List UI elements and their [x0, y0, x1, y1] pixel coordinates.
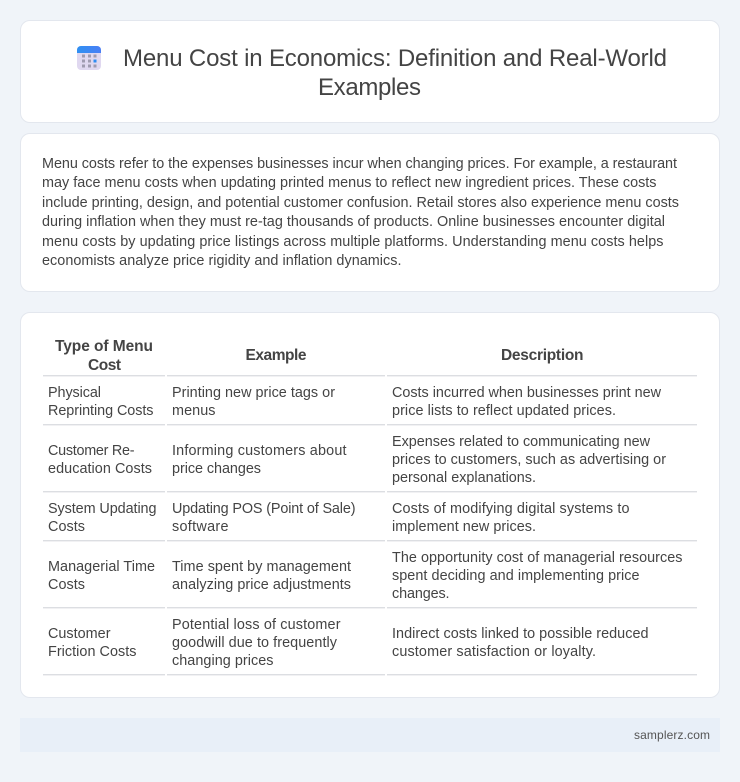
row: customer re-education: price changes [172, 461, 261, 477]
row: system updating: implement new prices. [392, 519, 536, 535]
icon: calendar [77, 46, 101, 70]
row: system updating: Costs of modifying digital systems to [392, 501, 630, 517]
row: system updating: Updating POS (Point of Sale) [172, 501, 356, 517]
title [123, 45, 667, 101]
row: managerial time [48, 550, 682, 602]
table header: Type of Menu [55, 338, 153, 355]
row: customer friction: changing prices [172, 653, 274, 669]
row: physical reprinting: Reprinting Costs [48, 403, 154, 419]
title: Examples [318, 74, 421, 101]
table header [55, 338, 584, 374]
panel: table card [20, 312, 720, 698]
row: system updating: Costs [48, 519, 85, 535]
row: system updating: software [172, 519, 228, 535]
row: customer re-education: prices to customers, such as advertising or [392, 452, 666, 468]
row: physical reprinting: menus [172, 403, 216, 419]
row: physical reprinting: Costs incurred when businesses print new [392, 385, 662, 401]
text block: intro: during inflation when they must re-tag thousands of products. Online businesses encounter digital [42, 214, 665, 230]
text block: intro: may face menu costs when updating printed menus to reflect new ingredient prices. These costs [42, 175, 656, 191]
footer bar [20, 718, 720, 752]
row: customer friction: Potential loss of customer [172, 617, 341, 633]
title: Menu Cost in Economics: Definition and Real-World [123, 45, 667, 72]
row: managerial time: Time spent by management [172, 559, 351, 575]
text block: intro: include printing, design, and potential customer confusion. Retail stores also experience menu costs [42, 195, 679, 211]
row: physical reprinting [48, 385, 662, 419]
text block: intro: Menu costs refer to the expenses businesses incur when changing prices. For example, a restaurant [42, 156, 677, 172]
row rules [43, 375, 697, 676]
row: customer re-education [48, 434, 666, 486]
row: customer friction [48, 617, 648, 669]
panel: title card [20, 20, 720, 123]
row: managerial time: The opportunity cost of managerial resources [392, 550, 682, 566]
text block: intro [42, 156, 679, 269]
row: customer re-education: Expenses related to communicating new [392, 434, 651, 450]
row: customer friction: goodwill due to frequently [172, 635, 338, 651]
footer credit: samplerz.com [634, 728, 710, 742]
row: managerial time: analyzing price adjustments [172, 577, 351, 593]
text block: intro: menu costs by updating price listings across multiple platforms. Understanding menu costs helps [42, 234, 664, 250]
row: customer friction: customer satisfaction or loyalty. [392, 644, 596, 660]
row: physical reprinting: price lists to reflect updated prices. [392, 403, 616, 419]
row: customer friction: Indirect costs linked to possible reduced [392, 626, 648, 642]
row: system updating: System Updating [48, 501, 156, 517]
row: physical reprinting: Printing new price tags or [172, 385, 335, 401]
row: physical reprinting: Physical [48, 385, 101, 401]
row: customer friction: Customer [48, 626, 111, 642]
row: customer friction: Friction Costs [48, 644, 136, 660]
row: system updating [48, 501, 630, 535]
row: customer re-education: Informing customers about [172, 443, 346, 459]
row: customer re-education: personal explanations. [392, 470, 536, 486]
row: managerial time: changes. [392, 586, 450, 602]
table header: Description [501, 347, 584, 364]
table header: Cost [88, 357, 121, 374]
row: customer re-education: education Costs [48, 461, 152, 477]
row: managerial time: spent deciding and implementing price [392, 568, 640, 584]
row: managerial time: Managerial Time [48, 559, 155, 575]
panel: intro paragraph [20, 133, 720, 292]
row: managerial time: Costs [48, 577, 85, 593]
row: customer re-education: Customer Re- [48, 443, 135, 459]
text block: intro: economists analyze price rigidity and inflation dynamics. [42, 253, 402, 269]
table header: Example [246, 347, 307, 364]
